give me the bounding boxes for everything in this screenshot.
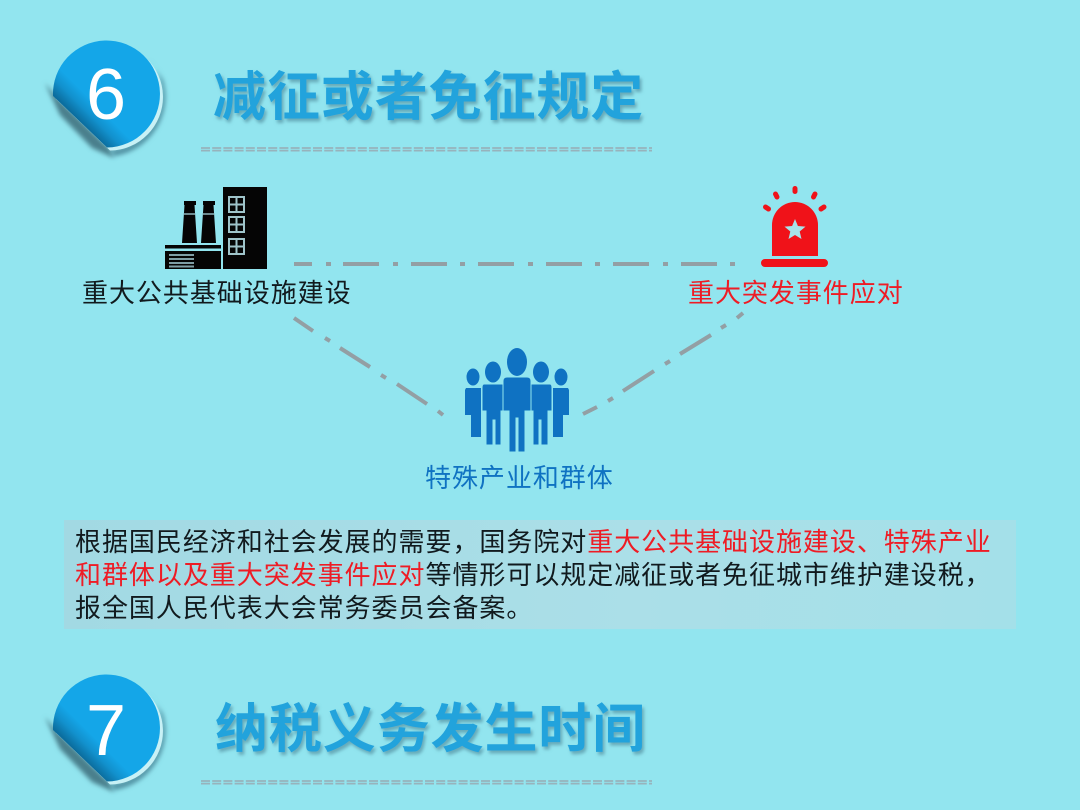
section 6 number badge: 6: [86, 55, 126, 135]
label: special industries and groups: 特殊产业和群体: [425, 463, 614, 493]
label: major infrastructure: 重大公共基础设施建设: [82, 278, 352, 308]
section 6 number badge: [45, 41, 165, 158]
icon: group of people: [465, 348, 569, 452]
text panel: exemption explanation: 和群体以及重大突发事件应对等情形可以规定减征或者免征城市维护建设税，: [75, 560, 992, 590]
section 7 number badge: [45, 675, 165, 792]
label: major emergencies: 重大突发事件应对: [688, 278, 904, 308]
text panel: exemption explanation: 根据国民经济和社会发展的需要，国务院对重大公共基础设施建设、特殊产业: [75, 527, 992, 557]
text panel: exemption explanation: 报全国人民代表大会常务委员会备案。: [75, 593, 533, 623]
heading rule: section 6: [201, 148, 652, 151]
icon: factory and office building: [165, 187, 267, 269]
heading: section 7: 纳税义务发生时间: [215, 700, 646, 759]
icon: red siren: [761, 188, 828, 267]
text panel: exemption explanation: [64, 520, 1016, 629]
section 7 number badge: 7: [86, 691, 126, 771]
heading: section 6: 减征或者免征规定: [213, 68, 644, 127]
connector lines triangle: [294, 264, 743, 415]
heading rule: section 7: [201, 781, 652, 784]
